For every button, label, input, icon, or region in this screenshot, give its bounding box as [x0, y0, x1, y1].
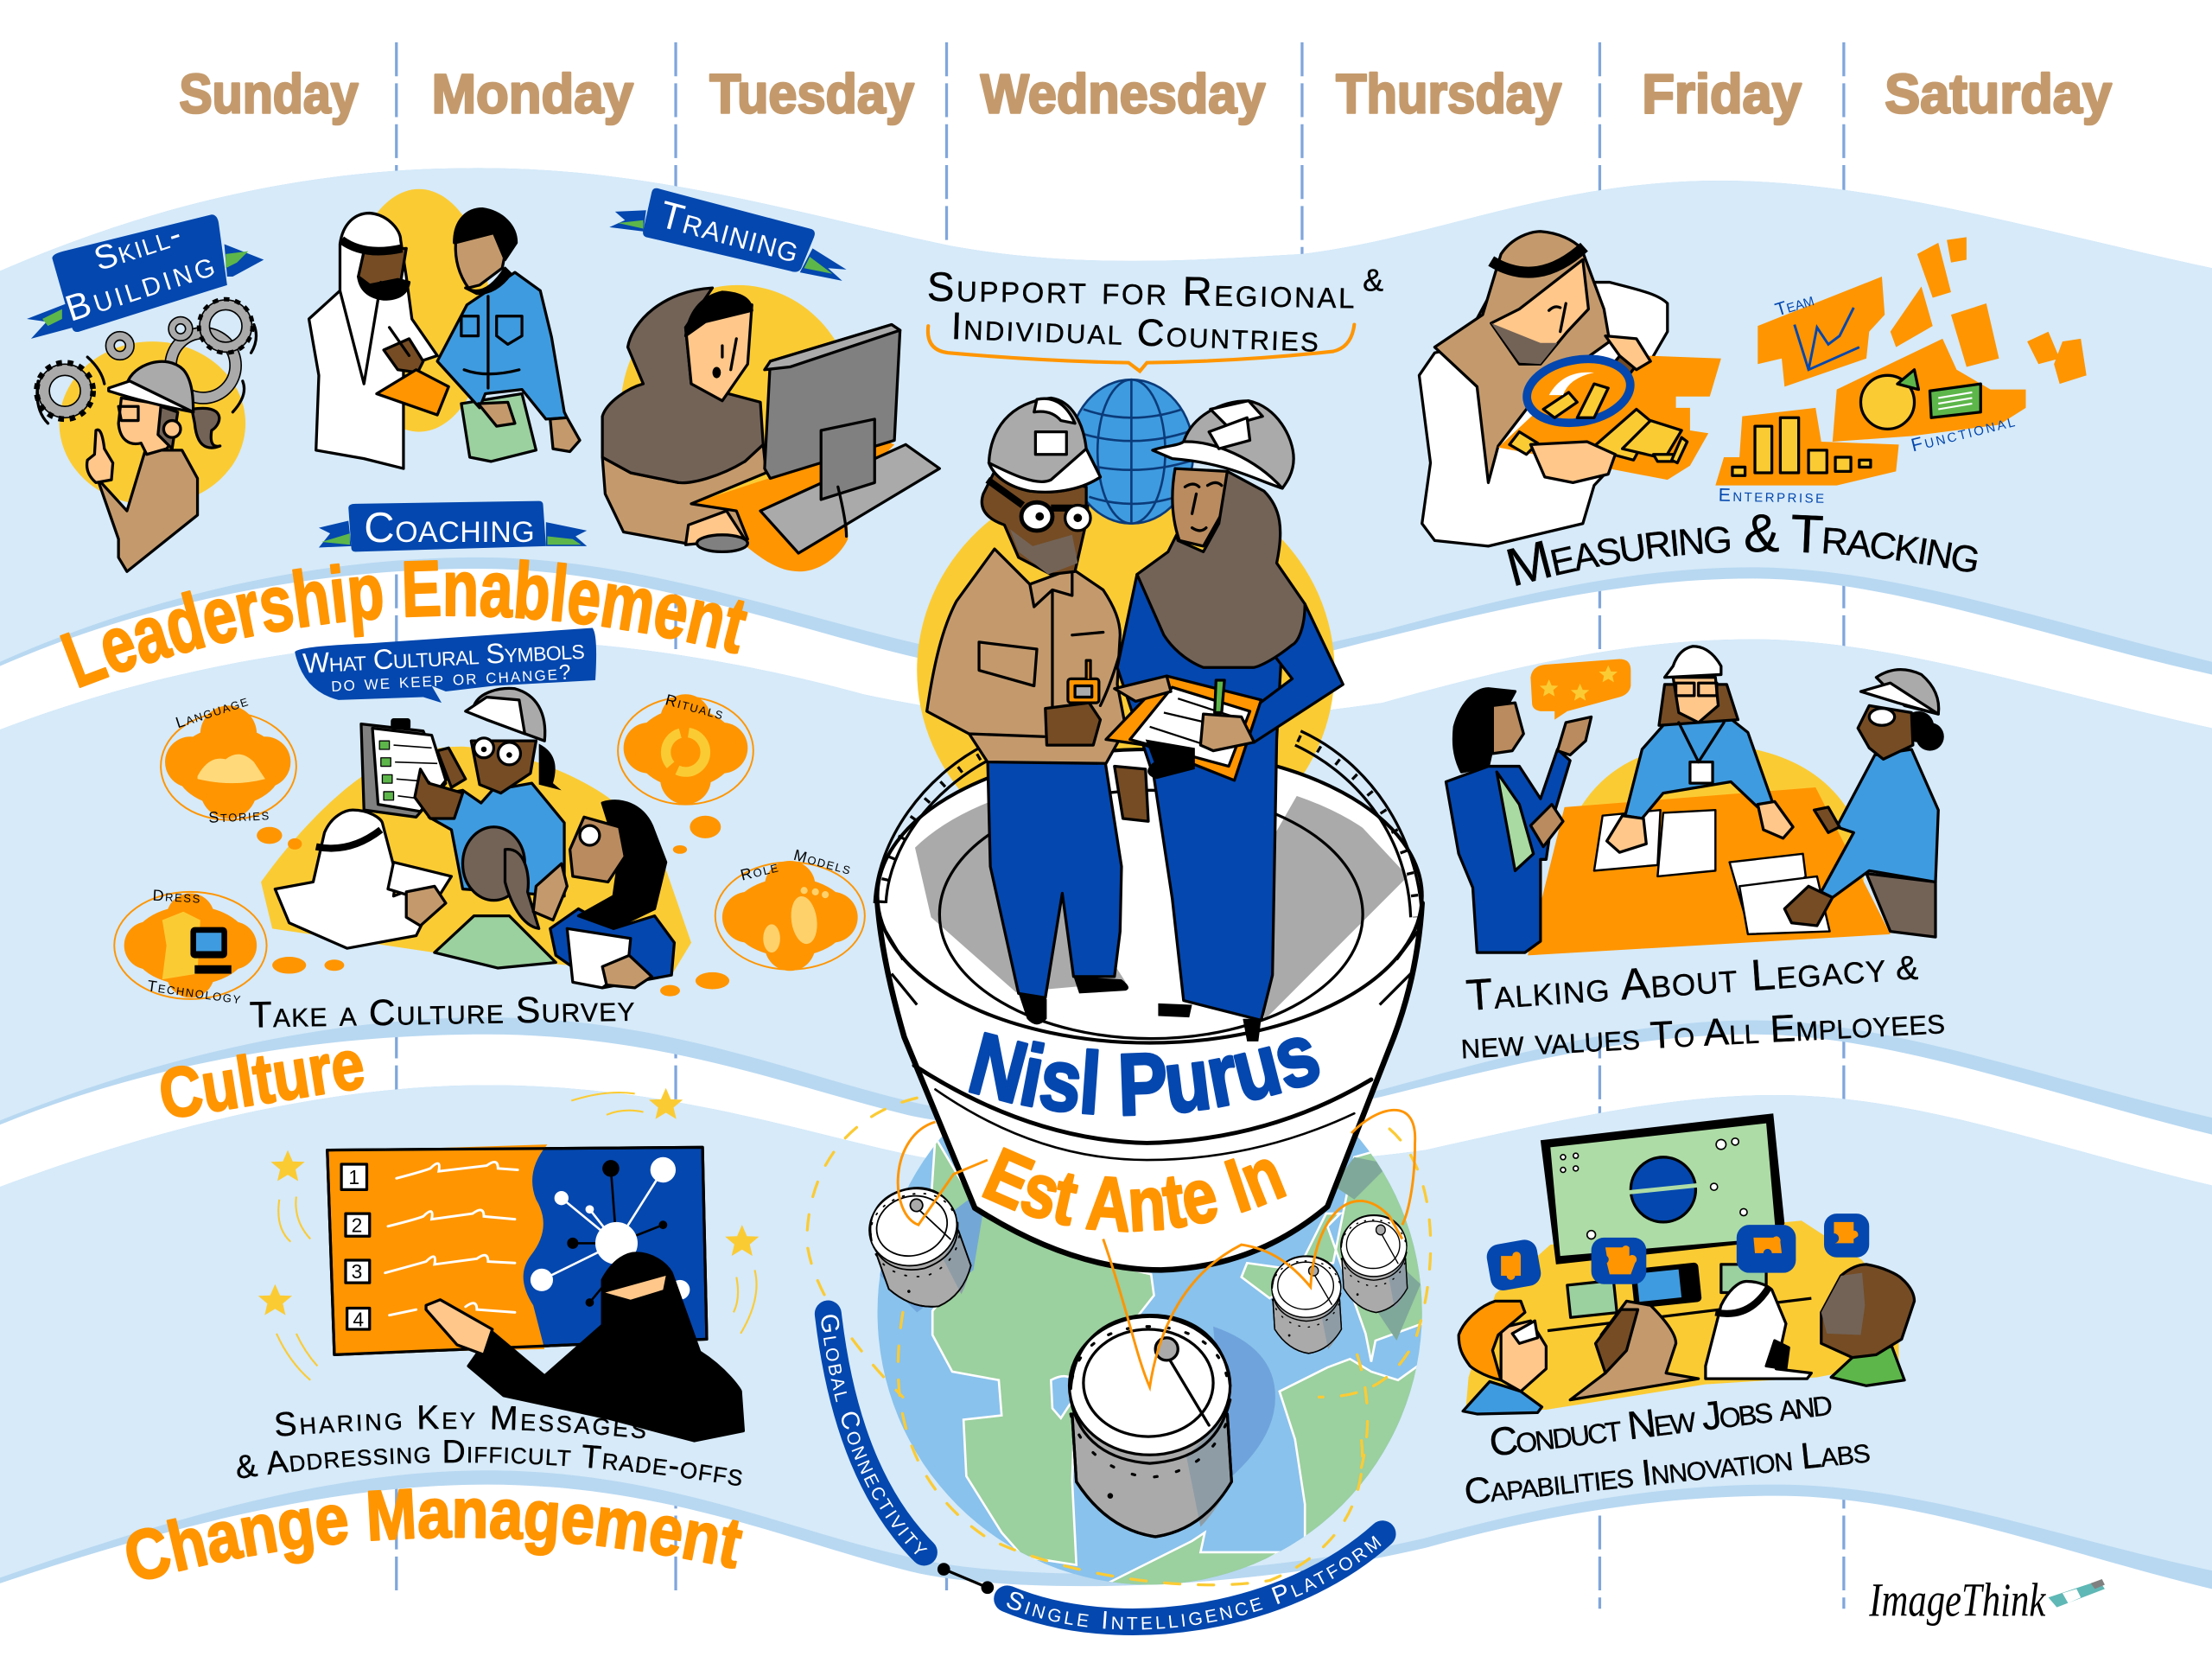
day headers — [179, 64, 2113, 125]
person: woman in black hijab — [533, 801, 674, 988]
scene: sharing key messages — [237, 1087, 759, 1486]
banner: skill-building — [27, 214, 264, 339]
logo: nisl purus: Nisl Purus — [968, 1032, 1320, 1117]
person: middle — [1607, 647, 1793, 852]
list numbers: 1 — [348, 1166, 359, 1188]
person: man in ghutra — [275, 810, 451, 948]
icon: wire globe — [1070, 379, 1193, 524]
chart: enterprise: Enterprise — [1718, 486, 1824, 507]
caption: talking about legacy: new values To All Employees — [1459, 999, 1948, 1067]
cloud: dress technology: Technology — [146, 977, 243, 1007]
day headers: Monday — [432, 64, 634, 125]
person: right worker — [1784, 670, 1944, 937]
bubble: what cultural symbols: do we keep or change? — [331, 661, 571, 697]
person: magnifying data — [1419, 232, 1668, 546]
dashed connection ring — [807, 1098, 1431, 1585]
blocks — [1891, 237, 2087, 384]
caption: support for regional and individual countries — [926, 262, 1383, 371]
scene: measuring and tracking — [1417, 230, 2087, 586]
chart: team — [1758, 277, 1885, 386]
heading: leadership enablement: Leadership Enablement — [60, 558, 748, 688]
logo: nisl purus — [968, 1032, 1320, 1117]
earth — [878, 1136, 1422, 1585]
orange connection arcs — [898, 1110, 1415, 1387]
caption: measuring and tracking: Measuring & Tracking — [1507, 514, 1978, 586]
list numbers — [341, 1164, 370, 1331]
person: tan hijab — [1570, 1301, 1699, 1400]
logo: est ante in — [982, 1147, 1287, 1233]
caption: sharing key messages: Sharing Key Messages — [276, 1405, 645, 1438]
band: culture — [0, 640, 2212, 1135]
day headers: Wednesday — [981, 64, 1266, 125]
railing — [874, 731, 1422, 1004]
person: engineer — [87, 361, 220, 571]
band: leadership enablement — [0, 168, 2212, 689]
scene: coaching — [309, 189, 580, 468]
icon: pen — [2049, 1579, 2105, 1608]
scene: skill-building — [36, 299, 256, 571]
caption: sharing key messages — [237, 1405, 742, 1486]
stars — [258, 1088, 759, 1315]
person: presenter in niqab — [426, 1253, 743, 1441]
caption: talking about legacy: & — [1896, 950, 1918, 987]
person: white robe — [309, 213, 437, 468]
banner: coaching — [319, 501, 587, 551]
day headers: Sunday — [179, 64, 359, 125]
cloud: role models: Models — [792, 846, 854, 878]
day headers: Tuesday — [709, 64, 915, 125]
table — [1528, 787, 1891, 955]
icon: magnifier — [1522, 336, 1650, 430]
caption: support for regional and individual countries: & — [1363, 262, 1383, 297]
hand — [1530, 442, 1615, 482]
scene: innovation labs — [1459, 1113, 1915, 1512]
chart: orange data sheet — [1498, 355, 1721, 480]
logo: est ante in: Est Ante In — [982, 1147, 1287, 1233]
icon: gears — [36, 299, 256, 424]
bubble: what cultural symbols — [295, 628, 596, 703]
clipboard — [1106, 676, 1262, 780]
caption: conduct new jobs: Capabilities Innovation Labs — [1462, 1429, 1873, 1512]
cloud: rituals — [618, 691, 753, 805]
banner: skill-building: Skill- — [90, 215, 187, 278]
scene: talking about legacy — [1446, 647, 1948, 1067]
icon: computer — [760, 325, 939, 553]
caption: support for regional and individual countries: Support for Regional — [926, 264, 1357, 317]
cloud: dress technology: Dress — [152, 887, 202, 907]
clipboard: survey — [361, 718, 466, 819]
board — [327, 1144, 707, 1354]
wall screen — [1541, 1113, 1784, 1264]
list numbers: 4 — [353, 1309, 364, 1331]
cloud: language stories: Stories — [208, 806, 270, 826]
heading: change management: Change Management — [126, 1488, 743, 1580]
cloud: language stories: Language — [174, 691, 251, 731]
cloud: dress technology — [114, 887, 267, 1007]
cloud: role models — [715, 846, 865, 971]
caption: support for regional and individual countries: Individual Countries — [950, 305, 1321, 360]
storage tanks on globe — [860, 1177, 1408, 1537]
list numbers: 2 — [352, 1214, 362, 1236]
person: hijab — [602, 288, 766, 551]
heading: culture: Culture — [154, 1024, 370, 1135]
day headers: Saturday — [1885, 64, 2113, 125]
speech bubble — [1530, 659, 1630, 720]
chart: team: Team — [1773, 290, 1816, 321]
label: global connectivity: Global Connectivity — [821, 1315, 928, 1554]
caption: conduct new jobs: Conduct New Jobs and — [1487, 1379, 1837, 1465]
speech bubbles: puzzle — [1484, 1214, 1869, 1292]
day headers: Friday — [1642, 64, 1802, 125]
chart: enterprise — [1715, 408, 1899, 507]
day headers: Thursday — [1336, 64, 1562, 125]
label: single intelligence platform: Single Intelligence Platform — [1007, 1535, 1382, 1630]
list numbers: 3 — [352, 1260, 362, 1283]
person: white ghutra — [1706, 1281, 1811, 1379]
person: blue shirt — [437, 209, 580, 462]
cloud: language stories — [161, 691, 296, 826]
caption: conduct new jobs — [1462, 1379, 1873, 1512]
desk — [691, 440, 894, 571]
chart: functional: Functional — [1910, 411, 2017, 455]
chart: functional — [1833, 339, 2025, 455]
network diagram — [531, 1157, 690, 1307]
person: green collar — [1821, 1264, 1915, 1386]
cloud: role models: Role — [739, 857, 781, 884]
banner: training — [609, 188, 847, 281]
bubble: what cultural symbols: What Cultural Symbols — [302, 633, 585, 679]
sun: center backdrop — [917, 473, 1334, 868]
banner: coaching: Coaching — [364, 505, 536, 551]
caption: sharing key messages: & Addressing Difficult Trade-offs — [237, 1440, 742, 1486]
person: woman in suit — [1446, 659, 1630, 952]
desk and terminals — [1548, 1264, 1811, 1331]
person: glasses orange hair — [1459, 1301, 1546, 1414]
main tank — [873, 729, 1425, 1273]
clipboard — [377, 370, 448, 415]
banner: skill-building: Building — [60, 243, 220, 329]
person: man with hard hat — [927, 398, 1148, 1024]
signature: imagethink: ImageThink — [1868, 1574, 2046, 1627]
caption: take a culture survey: Take a Culture Survey — [249, 988, 638, 1035]
band: change management — [0, 1086, 2212, 1589]
person: ponytail — [435, 827, 556, 968]
person: woman with clipboard — [1106, 401, 1343, 1042]
scene: culture survey — [261, 688, 691, 988]
caption: talking about legacy — [1459, 941, 1948, 1067]
connector dots — [939, 1564, 993, 1592]
scene: training — [602, 285, 939, 571]
banner: training: Training — [655, 194, 805, 271]
caption: talking about legacy: Talking About Legacy — [1465, 941, 1890, 1020]
day column dividers — [397, 42, 1844, 1608]
papers — [1594, 810, 1830, 934]
person: survey woman — [429, 688, 564, 896]
small thought puffs — [257, 816, 729, 997]
cloud: rituals: Rituals — [664, 691, 727, 723]
